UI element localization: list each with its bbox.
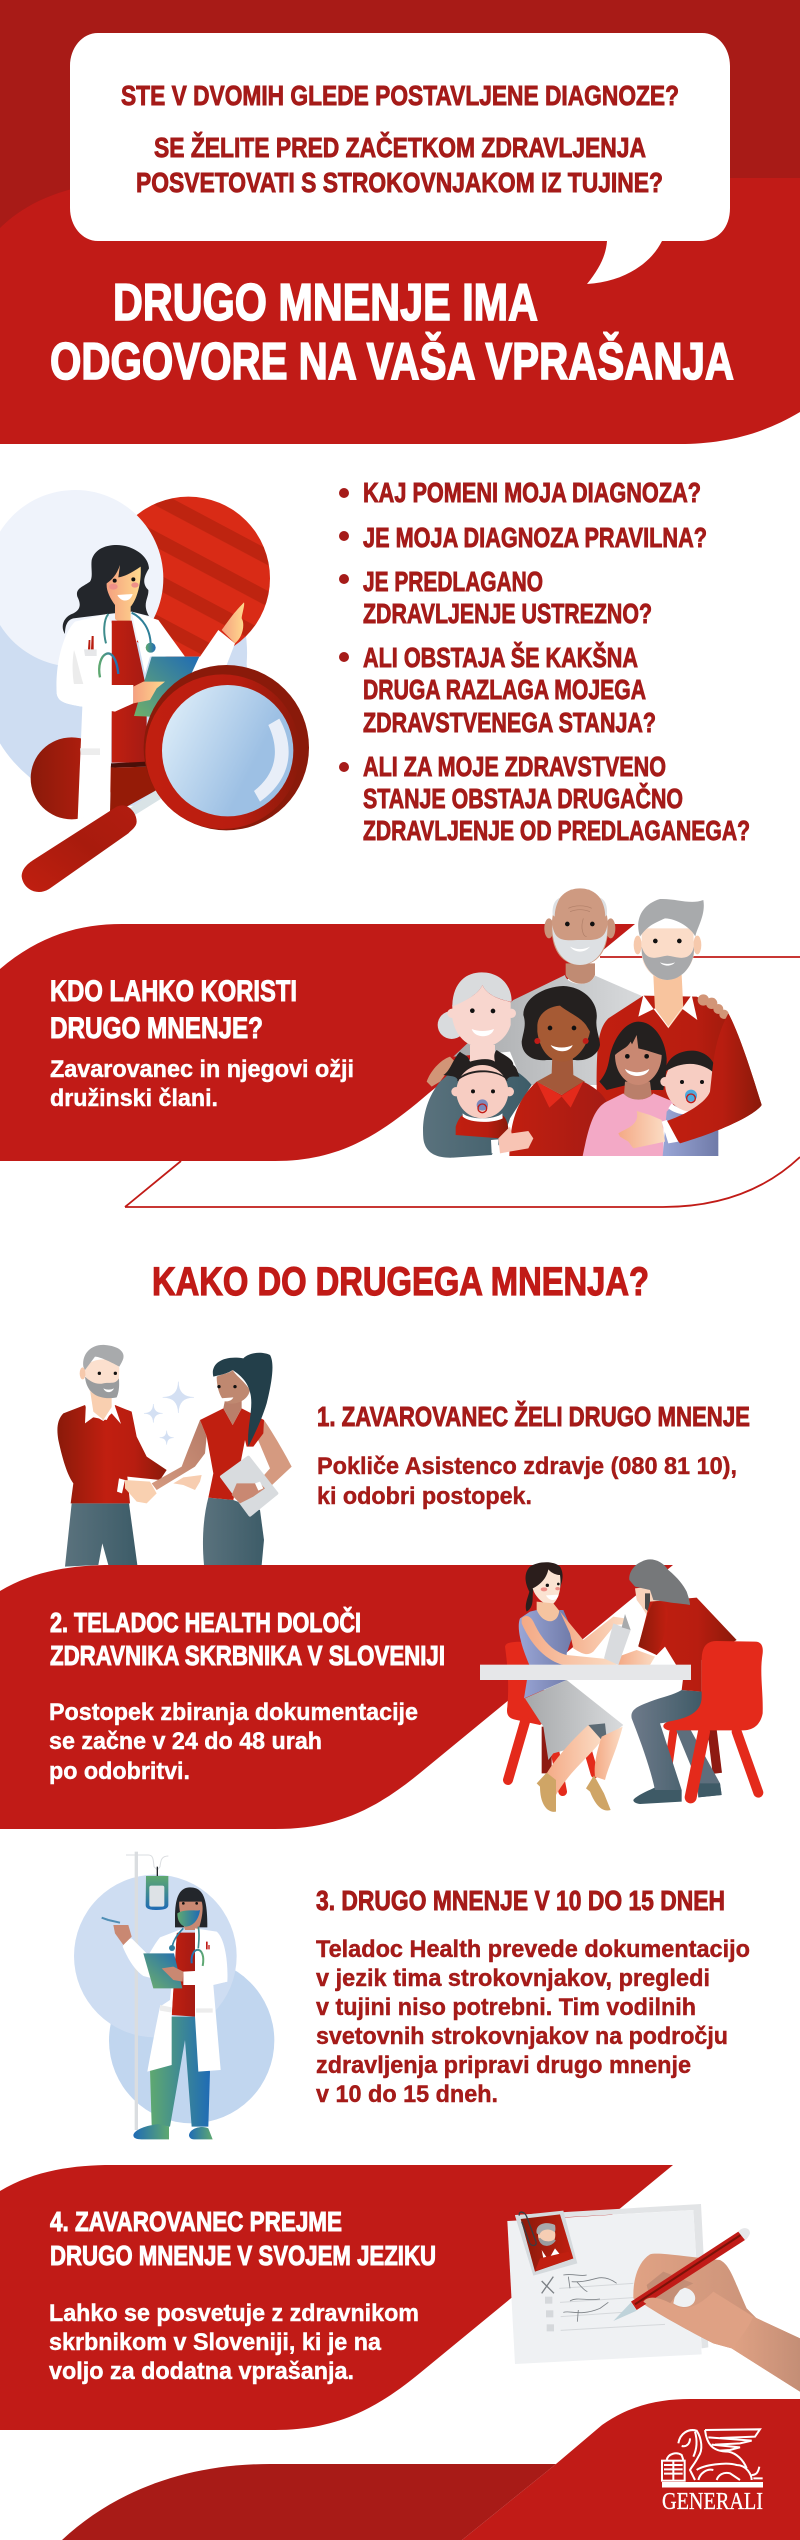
- footer shapes: [62, 2399, 800, 2540]
- paper: [507, 2204, 708, 2364]
- woman: [125, 1353, 292, 1565]
- question list: JE PREDLAGANO: [363, 566, 543, 597]
- question list: STANJE OBSTAJA DRUGAČNO: [363, 782, 683, 814]
- step 3 text: Teladoc Health prevede dokumentacijo: [316, 1936, 750, 1963]
- IV stand: [126, 1852, 168, 2130]
- title: [50, 274, 734, 391]
- sparkles: [144, 1382, 194, 1445]
- step 4 text: voljo za dodatna vprašanja.: [49, 2358, 354, 2385]
- heading: how to: KAKO DO DRUGEGA MNENJA?: [152, 1260, 649, 1304]
- illustration: form and writing hand: [507, 2204, 800, 2392]
- girl: [583, 1022, 673, 1156]
- step 4 heading: DRUGO MNENJE V SVOJEM JEZIKU: [50, 2240, 436, 2271]
- step 3 text: v jezik tima strokovnjakov, pregledi: [316, 1965, 710, 1992]
- doctor figure: [56, 545, 244, 819]
- Generali logo: GENERALI: [662, 2489, 763, 2515]
- illustration: handshake: [57, 1345, 292, 1567]
- baby left: [443, 1050, 533, 1153]
- speech bubble with questions: POSVETOVATI S STROKOVNJAKOM IZ TUJINE?: [136, 167, 663, 198]
- step 2 text: se začne v 24 do 48 urah: [49, 1728, 322, 1755]
- magnifying glass: [22, 665, 309, 892]
- speech bubble with questions: STE V DVOMIH GLEDE POSTAVLJENE DIAGNOZE?: [121, 80, 679, 111]
- lion emblem: [662, 2429, 763, 2481]
- illustration: doctor with magnifying glass: [0, 490, 309, 892]
- step 2 text: [49, 1699, 418, 1785]
- step 4 text: [49, 2300, 419, 2385]
- grandfather grey hair: [597, 899, 762, 1143]
- heading: KDO LAHKO KORISTI: [50, 975, 297, 1008]
- step 3 text: v 10 do 15 dneh.: [316, 2081, 498, 2108]
- step 1 text: ki odobri postopek.: [317, 1483, 532, 1510]
- body text: Zavarovanec in njegovi ožji: [50, 1056, 354, 1083]
- step 1 text: Pokliče Asistenco zdravje (080 81 10),: [317, 1453, 737, 1480]
- question list: KAJ POMENI MOJA DIAGNOZA?: [363, 477, 701, 508]
- panel: who can use second opinion: [0, 924, 800, 1207]
- question list: ALI ZA MOJE ZDRAVSTVENO: [363, 751, 666, 782]
- illustration: consultation at table: [480, 1559, 763, 1812]
- step 2 text: Postopek zbiranja dokumentacije: [49, 1699, 418, 1726]
- grandfather arm and hand: [618, 1013, 762, 1148]
- step 2 heading: 2. TELADOC HEALTH DOLOČI: [50, 1606, 361, 1638]
- step 2 heading: ZDRAVNIKA SKRBNIKA V SLOVENIJI: [50, 1640, 445, 1671]
- body text: [50, 1056, 354, 1112]
- right chair: [663, 1641, 763, 1797]
- speech bubble with questions: [70, 33, 730, 284]
- step 4 text: Lahko se posvetuje z zdravnikom: [49, 2300, 419, 2327]
- step 2 text: po odobritvi.: [49, 1758, 190, 1785]
- left chair: [505, 1642, 595, 1792]
- woman in centre: [509, 986, 607, 1156]
- question list: [339, 477, 750, 846]
- step 4 heading: 4. ZAVAROVANEC PREJME: [50, 2206, 342, 2237]
- question list: ZDRAVLJENJE USTREZNO?: [363, 598, 652, 629]
- seated woman: [519, 1562, 627, 1812]
- illustration: family: [423, 888, 762, 1158]
- title: DRUGO MNENJE IMA: [113, 274, 538, 332]
- heading: DRUGO MNENJE?: [50, 1012, 263, 1045]
- step 3 text: svetovnih strokovnjakov na področju: [316, 2023, 728, 2050]
- question list: ALI OBSTAJA ŠE KAKŠNA: [363, 641, 638, 673]
- doctor: [102, 1887, 228, 2139]
- header background: [0, 0, 800, 444]
- step 3 text: v tujini niso potrebni. Tim vodilnih: [316, 1994, 696, 2021]
- step 4 heading: [50, 2206, 436, 2271]
- panel: step 4: [0, 2165, 673, 2430]
- question list: DRUGA RAZLAGA MOJEGA: [363, 674, 646, 705]
- step 1 text: [317, 1401, 750, 1510]
- question list: ZDRAVSTVENEGA STANJA?: [363, 707, 656, 738]
- illustration: doctor with mask: [74, 1852, 274, 2139]
- step 2 heading: [50, 1606, 445, 1671]
- step 4 text: skrbnikom v Sloveniji, ki je na: [49, 2329, 382, 2356]
- grandfather bald: [453, 888, 643, 1085]
- photo with clip: [515, 2211, 577, 2276]
- question list: JE MOJA DIAGNOZA PRAVILNA?: [363, 522, 707, 553]
- body text: družinski člani.: [50, 1085, 218, 1112]
- man: [57, 1345, 167, 1567]
- grandmother: [423, 972, 532, 1158]
- heading: [50, 975, 297, 1045]
- Generali logo: [662, 2429, 763, 2515]
- panel: step 2: [0, 1565, 673, 1829]
- table: [480, 1665, 691, 1680]
- step 3 text: zdravljenja pripravi drugo mnenje: [316, 2052, 691, 2079]
- speech bubble with questions: SE ŽELITE PRED ZAČETKOM ZDRAVLJENJA: [154, 131, 646, 163]
- seated man: [604, 1559, 737, 1804]
- step 3 text: [316, 1885, 750, 2108]
- hand with pen: [613, 2228, 800, 2392]
- baby right: [660, 1051, 722, 1156]
